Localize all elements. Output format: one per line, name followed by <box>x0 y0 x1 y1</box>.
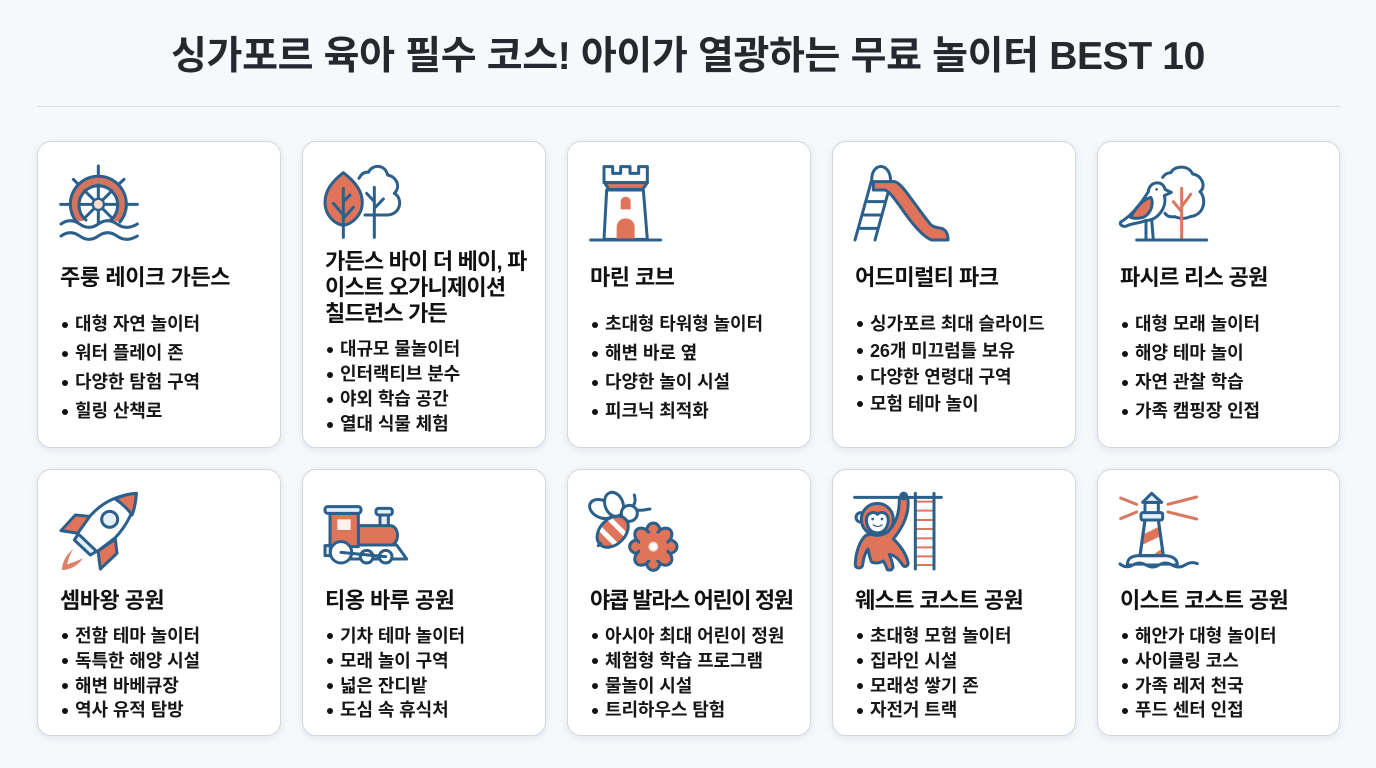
icon: leaf and tree <box>324 164 402 239</box>
icon: castle tower <box>589 165 662 242</box>
feature list: 넓은 잔디밭 <box>340 676 427 696</box>
feature list: 독특한 해양 시설 <box>75 651 200 671</box>
heading: 셈바왕 공원 <box>60 588 164 613</box>
icon: slide with ladder <box>854 165 950 242</box>
feature list: 26개 미끄럼틀 보유 <box>870 341 1015 361</box>
title: 싱가포르 육아 필수 코스! 아이가 열광하는 무료 놀이터 BEST 10 <box>171 35 1205 78</box>
heading <box>325 249 527 326</box>
feature list <box>592 314 763 421</box>
feature list <box>857 314 1044 414</box>
heading: 주룽 레이크 가든스 <box>60 265 230 290</box>
heading: 가든스 바이 더 베이, 파 <box>325 249 527 274</box>
feature list: 모래 놀이 구역 <box>340 651 449 671</box>
panel: 이스트 코스트 공원 <box>1097 469 1340 736</box>
feature list: 힐링 산책로 <box>75 401 162 421</box>
panel: 마린 코브 <box>567 141 811 448</box>
feature list: 대형 자연 놀이터 <box>75 314 200 334</box>
feature list: 물놀이 시설 <box>605 676 692 696</box>
icon: monkey on ladder <box>853 492 943 572</box>
feature list: 자전거 트랙 <box>870 700 957 720</box>
feature list: 해안가 대형 놀이터 <box>1135 626 1276 646</box>
panel: 셈바왕 공원 <box>37 469 281 736</box>
feature list: 열대 식물 체험 <box>340 414 449 434</box>
feature list: 대형 모래 놀이터 <box>1135 314 1260 334</box>
heading: 칠드런스 가든 <box>325 301 447 326</box>
icon: bird and tree <box>1118 166 1208 242</box>
feature list: 아시아 최대 어린이 정원 <box>605 626 784 646</box>
feature list: 피크닉 최적화 <box>605 401 709 421</box>
feature list: 워터 플레이 존 <box>75 343 184 363</box>
feature list: 역사 유적 탐방 <box>75 700 184 720</box>
feature list: 체험형 학습 프로그램 <box>605 651 763 671</box>
feature list: 사이클링 코스 <box>1135 651 1239 671</box>
feature list: 야외 학습 공간 <box>340 389 449 409</box>
icon: ship wheel on waves <box>59 164 139 241</box>
icon: lighthouse <box>1118 492 1199 568</box>
feature list: 가족 캠핑장 인접 <box>1135 401 1260 421</box>
icon: steam train <box>324 505 408 564</box>
heading: 마린 코브 <box>590 265 674 290</box>
feature list: 초대형 모험 놀이터 <box>870 626 1011 646</box>
panel: 웨스트 코스트 공원 <box>832 469 1076 736</box>
heading: 파시르 리스 공원 <box>1120 265 1268 290</box>
panel: 야콥 발라스 어린이 정원 <box>567 469 811 736</box>
feature list: 다양한 연령대 구역 <box>870 367 1011 387</box>
feature list: 초대형 타워형 놀이터 <box>605 314 763 334</box>
panel: 어드미럴티 파크 <box>832 141 1076 448</box>
feature list <box>1122 314 1260 421</box>
panel: 가든스 바이 더 베이 <box>302 141 546 448</box>
feature list <box>857 626 1011 720</box>
feature list: 대규모 물놀이터 <box>340 339 460 359</box>
feature list <box>327 626 465 720</box>
heading: 어드미럴티 파크 <box>855 265 998 290</box>
feature list <box>327 339 460 434</box>
icon: rocket <box>59 492 138 571</box>
feature list: 트리하우스 탐험 <box>605 700 725 720</box>
heading: 웨스트 코스트 공원 <box>855 588 1023 613</box>
feature list: 모래성 쌓기 존 <box>870 676 979 696</box>
feature list: 다양한 탐험 구역 <box>75 372 200 392</box>
feature list: 인터랙티브 분수 <box>340 364 460 384</box>
heading: 티옹 바루 공원 <box>325 588 454 613</box>
feature list: 해변 바베큐장 <box>75 676 179 696</box>
feature list: 해변 바로 옆 <box>605 343 697 363</box>
feature list: 자연 관찰 학습 <box>1135 372 1244 392</box>
panel: 티옹 바루 공원 <box>302 469 546 736</box>
feature list: 기차 테마 놀이터 <box>340 626 465 646</box>
feature list <box>592 626 784 720</box>
feature list: 도심 속 휴식처 <box>340 700 449 720</box>
heading: 이스트 오가니제이션 <box>325 275 505 300</box>
feature list: 다양한 놀이 시설 <box>605 372 730 392</box>
feature list: 푸드 센터 인접 <box>1135 700 1244 720</box>
heading: 이스트 코스트 공원 <box>1120 588 1288 613</box>
feature list: 싱가포르 최대 슬라이드 <box>870 314 1044 334</box>
feature list <box>62 626 200 720</box>
feature list: 집라인 시설 <box>870 651 957 671</box>
panel: 주룽 레이크 가든스 <box>37 141 281 448</box>
icon: bee and flower <box>588 490 678 572</box>
feature list: 전함 테마 놀이터 <box>75 626 200 646</box>
feature list: 가족 레저 천국 <box>1135 676 1244 696</box>
feature list: 모험 테마 놀이 <box>870 394 979 414</box>
panel: 파시르 리스 공원 <box>1097 141 1340 448</box>
feature list <box>62 314 200 421</box>
feature list: 해양 테마 놀이 <box>1135 343 1244 363</box>
feature list <box>1122 626 1276 720</box>
heading: 야콥 발라스 어린이 정원 <box>590 588 793 613</box>
